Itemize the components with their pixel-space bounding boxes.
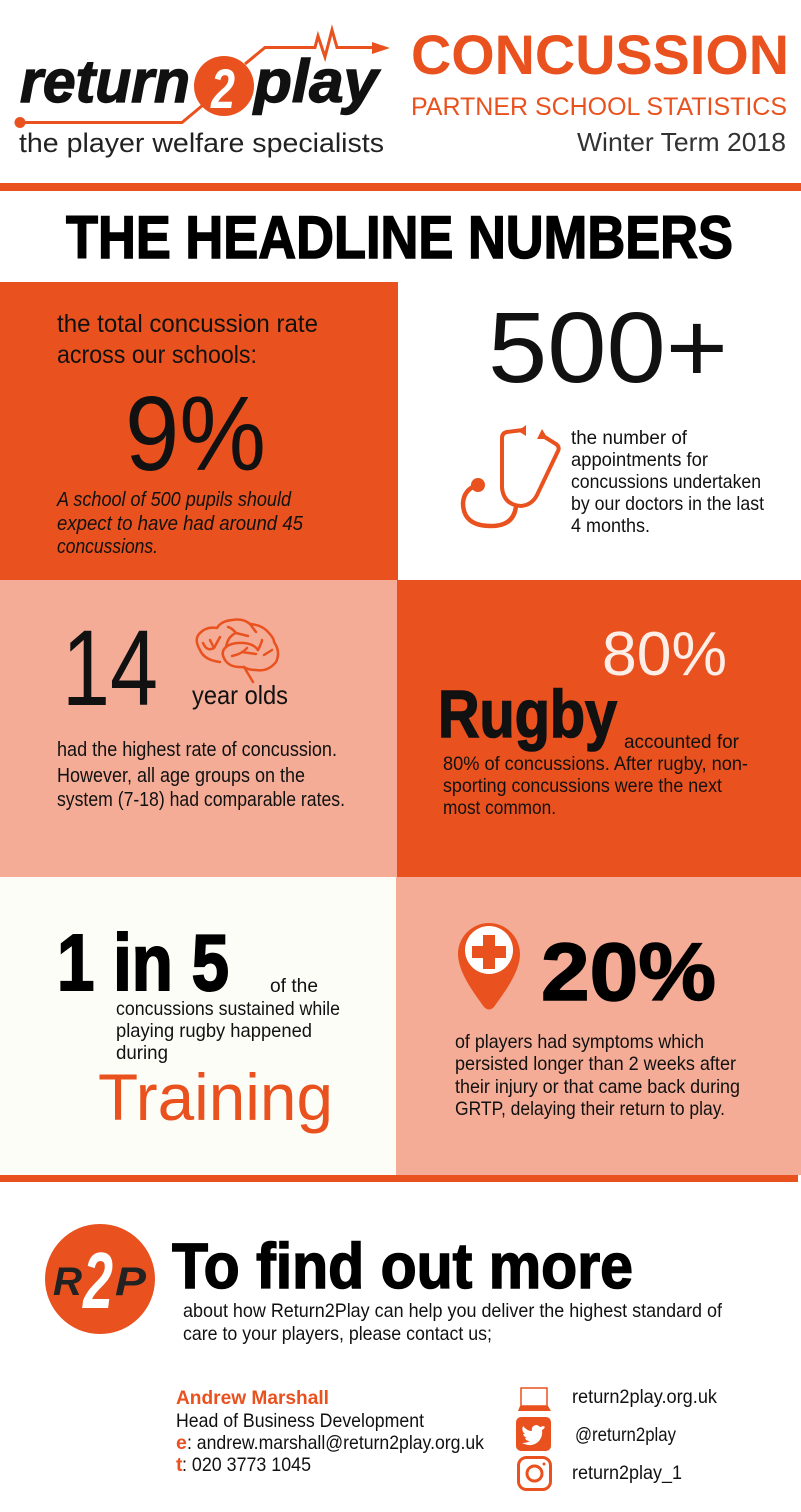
text: web and social handles: return2play.org.uk xyxy=(572,1387,717,1408)
panel: 20% symptoms: GRTP, delaying their return to play. xyxy=(455,1098,725,1120)
panel: 500+ appointments: concussions undertaken xyxy=(571,471,761,493)
logo: return2play: 2 xyxy=(210,57,235,120)
panel: 20% symptoms: 20% xyxy=(541,927,716,1018)
icon: R2P badge xyxy=(45,1224,155,1334)
text: contact details xyxy=(176,1387,484,1476)
panel: 1 in 5 training: 1 in 5 xyxy=(57,918,229,1007)
text: contact details: Andrew Marshall xyxy=(176,1387,329,1409)
icon: R2P badge: 2 xyxy=(82,1236,113,1325)
text: contact details: : 020 3773 1045 xyxy=(182,1454,311,1476)
text: contact details: Head of Business Development xyxy=(176,1410,425,1432)
panel: total concussion rate: expect to have had around 45 xyxy=(57,513,304,535)
panel: 20% symptoms xyxy=(396,877,801,1175)
text: contact intro xyxy=(183,1300,723,1345)
heading: to find out more: To find out more xyxy=(172,1230,633,1302)
panel: 500+ appointments: by our doctors in the last xyxy=(571,493,765,515)
panel: 1 in 5 training: of the xyxy=(270,975,318,997)
panel: 20% symptoms: of players had symptoms which xyxy=(455,1031,704,1053)
icon: laptop xyxy=(518,1388,551,1411)
logo: return2play xyxy=(14,30,390,158)
panel: 1 in 5 training: concussions sustained while xyxy=(116,998,340,1020)
title: concussion: PARTNER SCHOOL STATISTICS xyxy=(411,93,787,121)
panel: rugby 80%: 80% of concussions. After rugby, non- xyxy=(443,753,748,775)
panel: rugby 80%: Rugby xyxy=(438,677,617,752)
panel: rugby 80%: accounted for xyxy=(624,731,739,753)
icon: medical pin xyxy=(458,923,520,1010)
icon: stethoscope xyxy=(463,425,559,526)
logo: return2play: return xyxy=(20,48,190,115)
panel: rugby 80%: 80% xyxy=(602,620,727,689)
panel: 14 year olds: However, all age groups on the xyxy=(57,765,305,787)
title: concussion: CONCUSSION xyxy=(411,23,789,86)
panel: total concussion rate: the total concussion rate xyxy=(57,310,318,338)
panel: 500+ appointments xyxy=(463,292,765,537)
panel: total concussion rate: concussions. xyxy=(57,536,158,558)
panel: 14 year olds: 14 xyxy=(62,607,158,728)
panel: 14 year olds: year olds xyxy=(192,680,288,710)
panel: 14 year olds xyxy=(0,580,397,877)
panel: 500+ appointments: 500+ xyxy=(488,292,728,404)
panel: rugby 80%: most common. xyxy=(443,797,556,819)
panel: 1 in 5 training: playing rugby happened xyxy=(116,1020,312,1042)
text: contact details: e xyxy=(176,1432,187,1454)
icon: R2P badge: R xyxy=(53,1260,82,1304)
text: web and social handles: return2play_1 xyxy=(572,1463,682,1484)
panel: total concussion rate: across our schools: xyxy=(57,341,257,369)
logo: return2play: the player welfare specialists xyxy=(19,128,384,158)
text: contact details: : andrew.marshall@return2play.org.uk xyxy=(187,1432,484,1454)
panel: 14 year olds: had the highest rate of concussion. xyxy=(57,739,337,761)
icon: twitter xyxy=(516,1417,551,1451)
text: web and social handles xyxy=(572,1387,717,1484)
panel: 500+ appointments: 4 months. xyxy=(571,515,650,537)
text: contact details: t xyxy=(176,1454,183,1476)
panel: rugby 80%: sporting concussions were the next xyxy=(443,775,723,797)
panel: 14 year olds: system (7-18) had comparable rates. xyxy=(57,789,345,811)
panel: 1 in 5 training: during xyxy=(116,1042,168,1064)
text: web and social handles: @return2play xyxy=(575,1425,676,1446)
logo: return2play: play xyxy=(252,48,381,115)
panel: 1 in 5 training: Training xyxy=(98,1060,333,1134)
panel: 20% symptoms: their injury or that came back during xyxy=(455,1076,740,1098)
text: contact intro: care to your players, please contact us; xyxy=(183,1323,492,1345)
text: contact intro: about how Return2Play can help you deliver the highest standard of xyxy=(183,1300,723,1322)
icon: brain xyxy=(197,620,278,682)
panel: total concussion rate: A school of 500 pupils should xyxy=(56,489,292,511)
title: concussion xyxy=(411,23,789,157)
panel: total concussion rate xyxy=(0,282,398,580)
panel: rugby 80% xyxy=(397,580,801,877)
panel: 1 in 5 training xyxy=(0,877,396,1175)
title: concussion: Winter Term 2018 xyxy=(577,127,786,157)
icon: R2P badge: P xyxy=(115,1260,146,1304)
panel: 20% symptoms: persisted longer than 2 weeks after xyxy=(455,1053,736,1075)
panel: 500+ appointments: the number of xyxy=(571,427,688,449)
panel: total concussion rate: 9% xyxy=(125,375,266,493)
panel: 500+ appointments: appointments for xyxy=(571,449,708,471)
icon: instagram xyxy=(518,1458,550,1490)
